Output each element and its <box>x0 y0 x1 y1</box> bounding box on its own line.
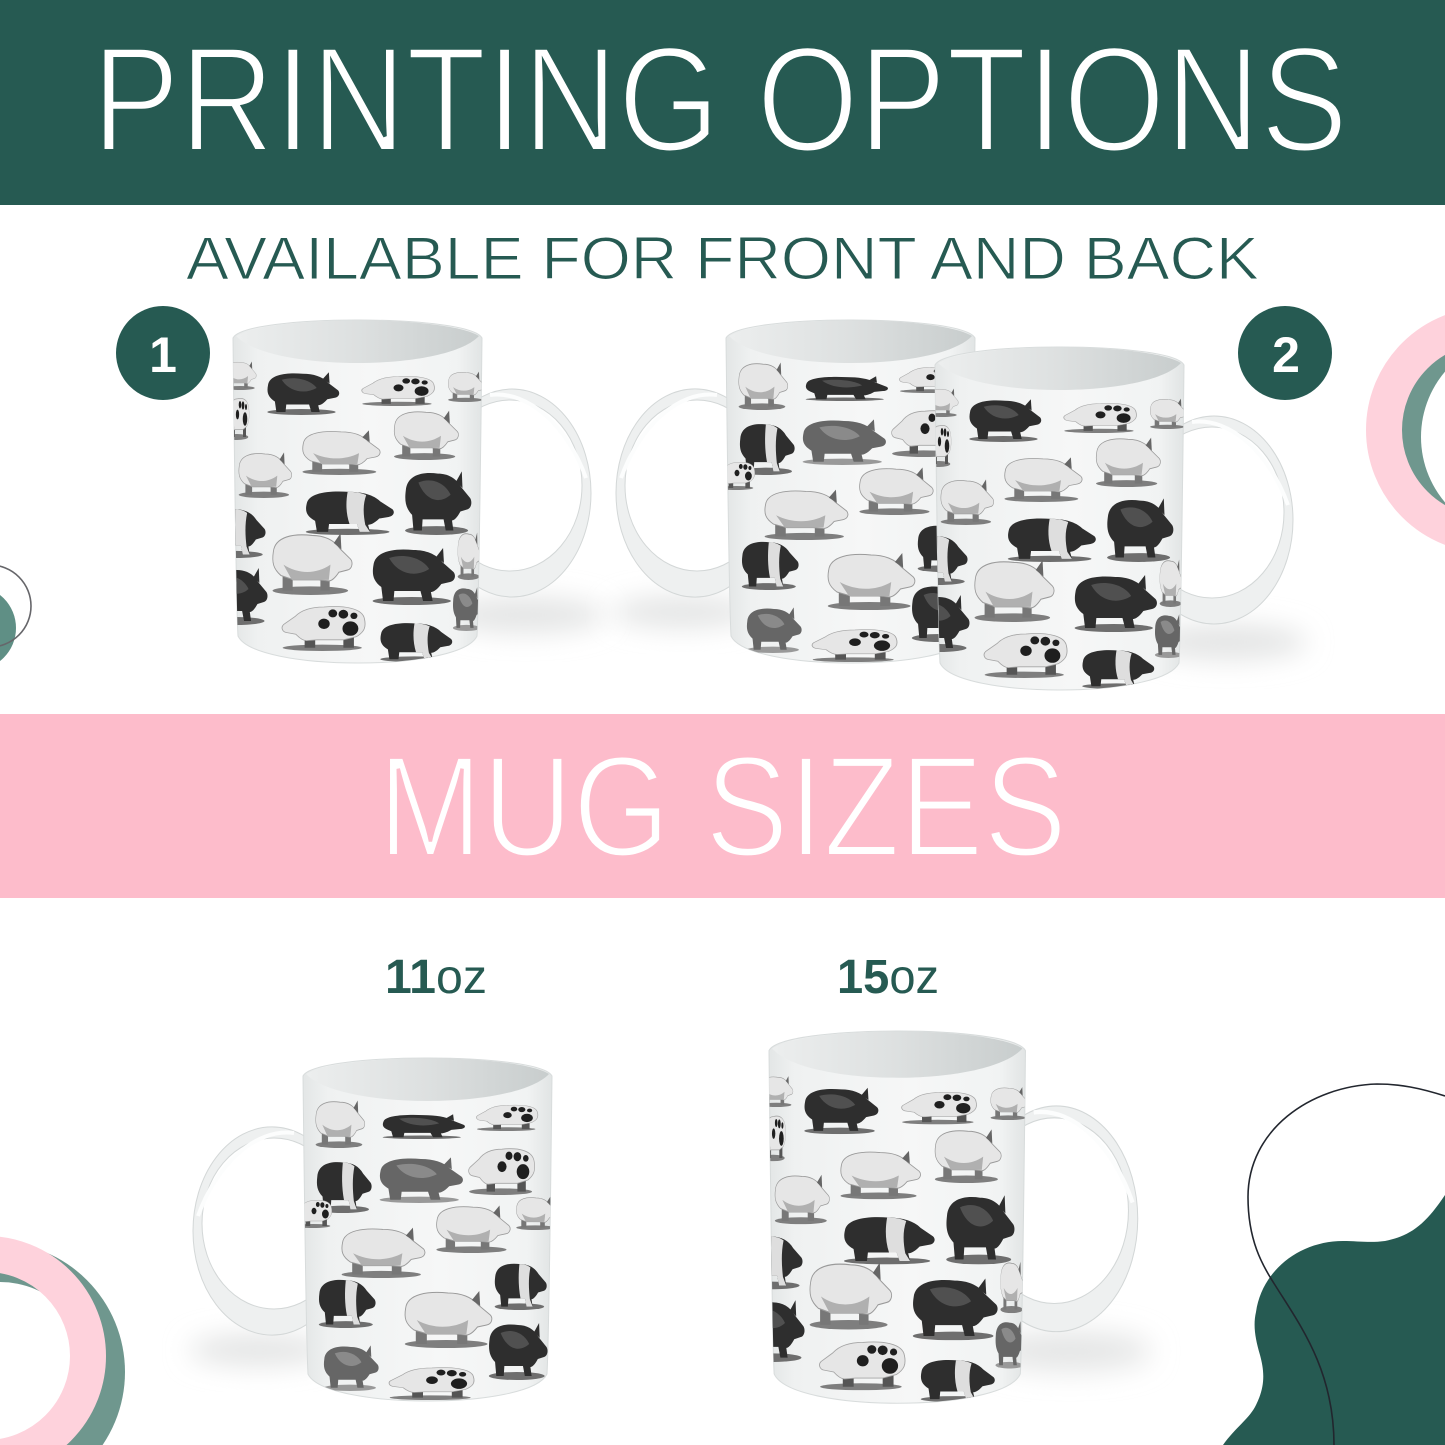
section band: mug sizes <box>0 714 1445 898</box>
mug 2: back print, handle left <box>612 320 979 663</box>
label: 11oz: 11oz <box>385 951 487 1004</box>
heading: mug sizes: MUG SIZES <box>378 726 1067 887</box>
decoration: bottom right blob <box>1223 1195 1445 1445</box>
mug: 15oz <box>742 1031 1152 1403</box>
mug: 11oz <box>189 1058 556 1401</box>
decoration: left small circle <box>0 565 31 670</box>
mug 3: front print, handle right, overlapping <box>909 347 1307 690</box>
header band: printing options <box>0 0 1445 205</box>
mug 1: front print, handle right <box>207 320 605 663</box>
badge: number 1: 1 <box>149 327 177 383</box>
subtitle: available for front and back: AVAILABLE FOR FRONT AND BACK <box>186 225 1259 292</box>
decoration: bottom left rings <box>0 1242 125 1445</box>
badge: number 2: 2 <box>1272 327 1300 383</box>
badge: number 2 <box>1238 306 1332 400</box>
decoration: bottom right outline curve <box>1248 1084 1445 1445</box>
badge: number 1 <box>116 306 210 400</box>
label: 15oz: 15oz <box>837 951 939 1004</box>
decoration: right rings <box>1384 325 1445 538</box>
